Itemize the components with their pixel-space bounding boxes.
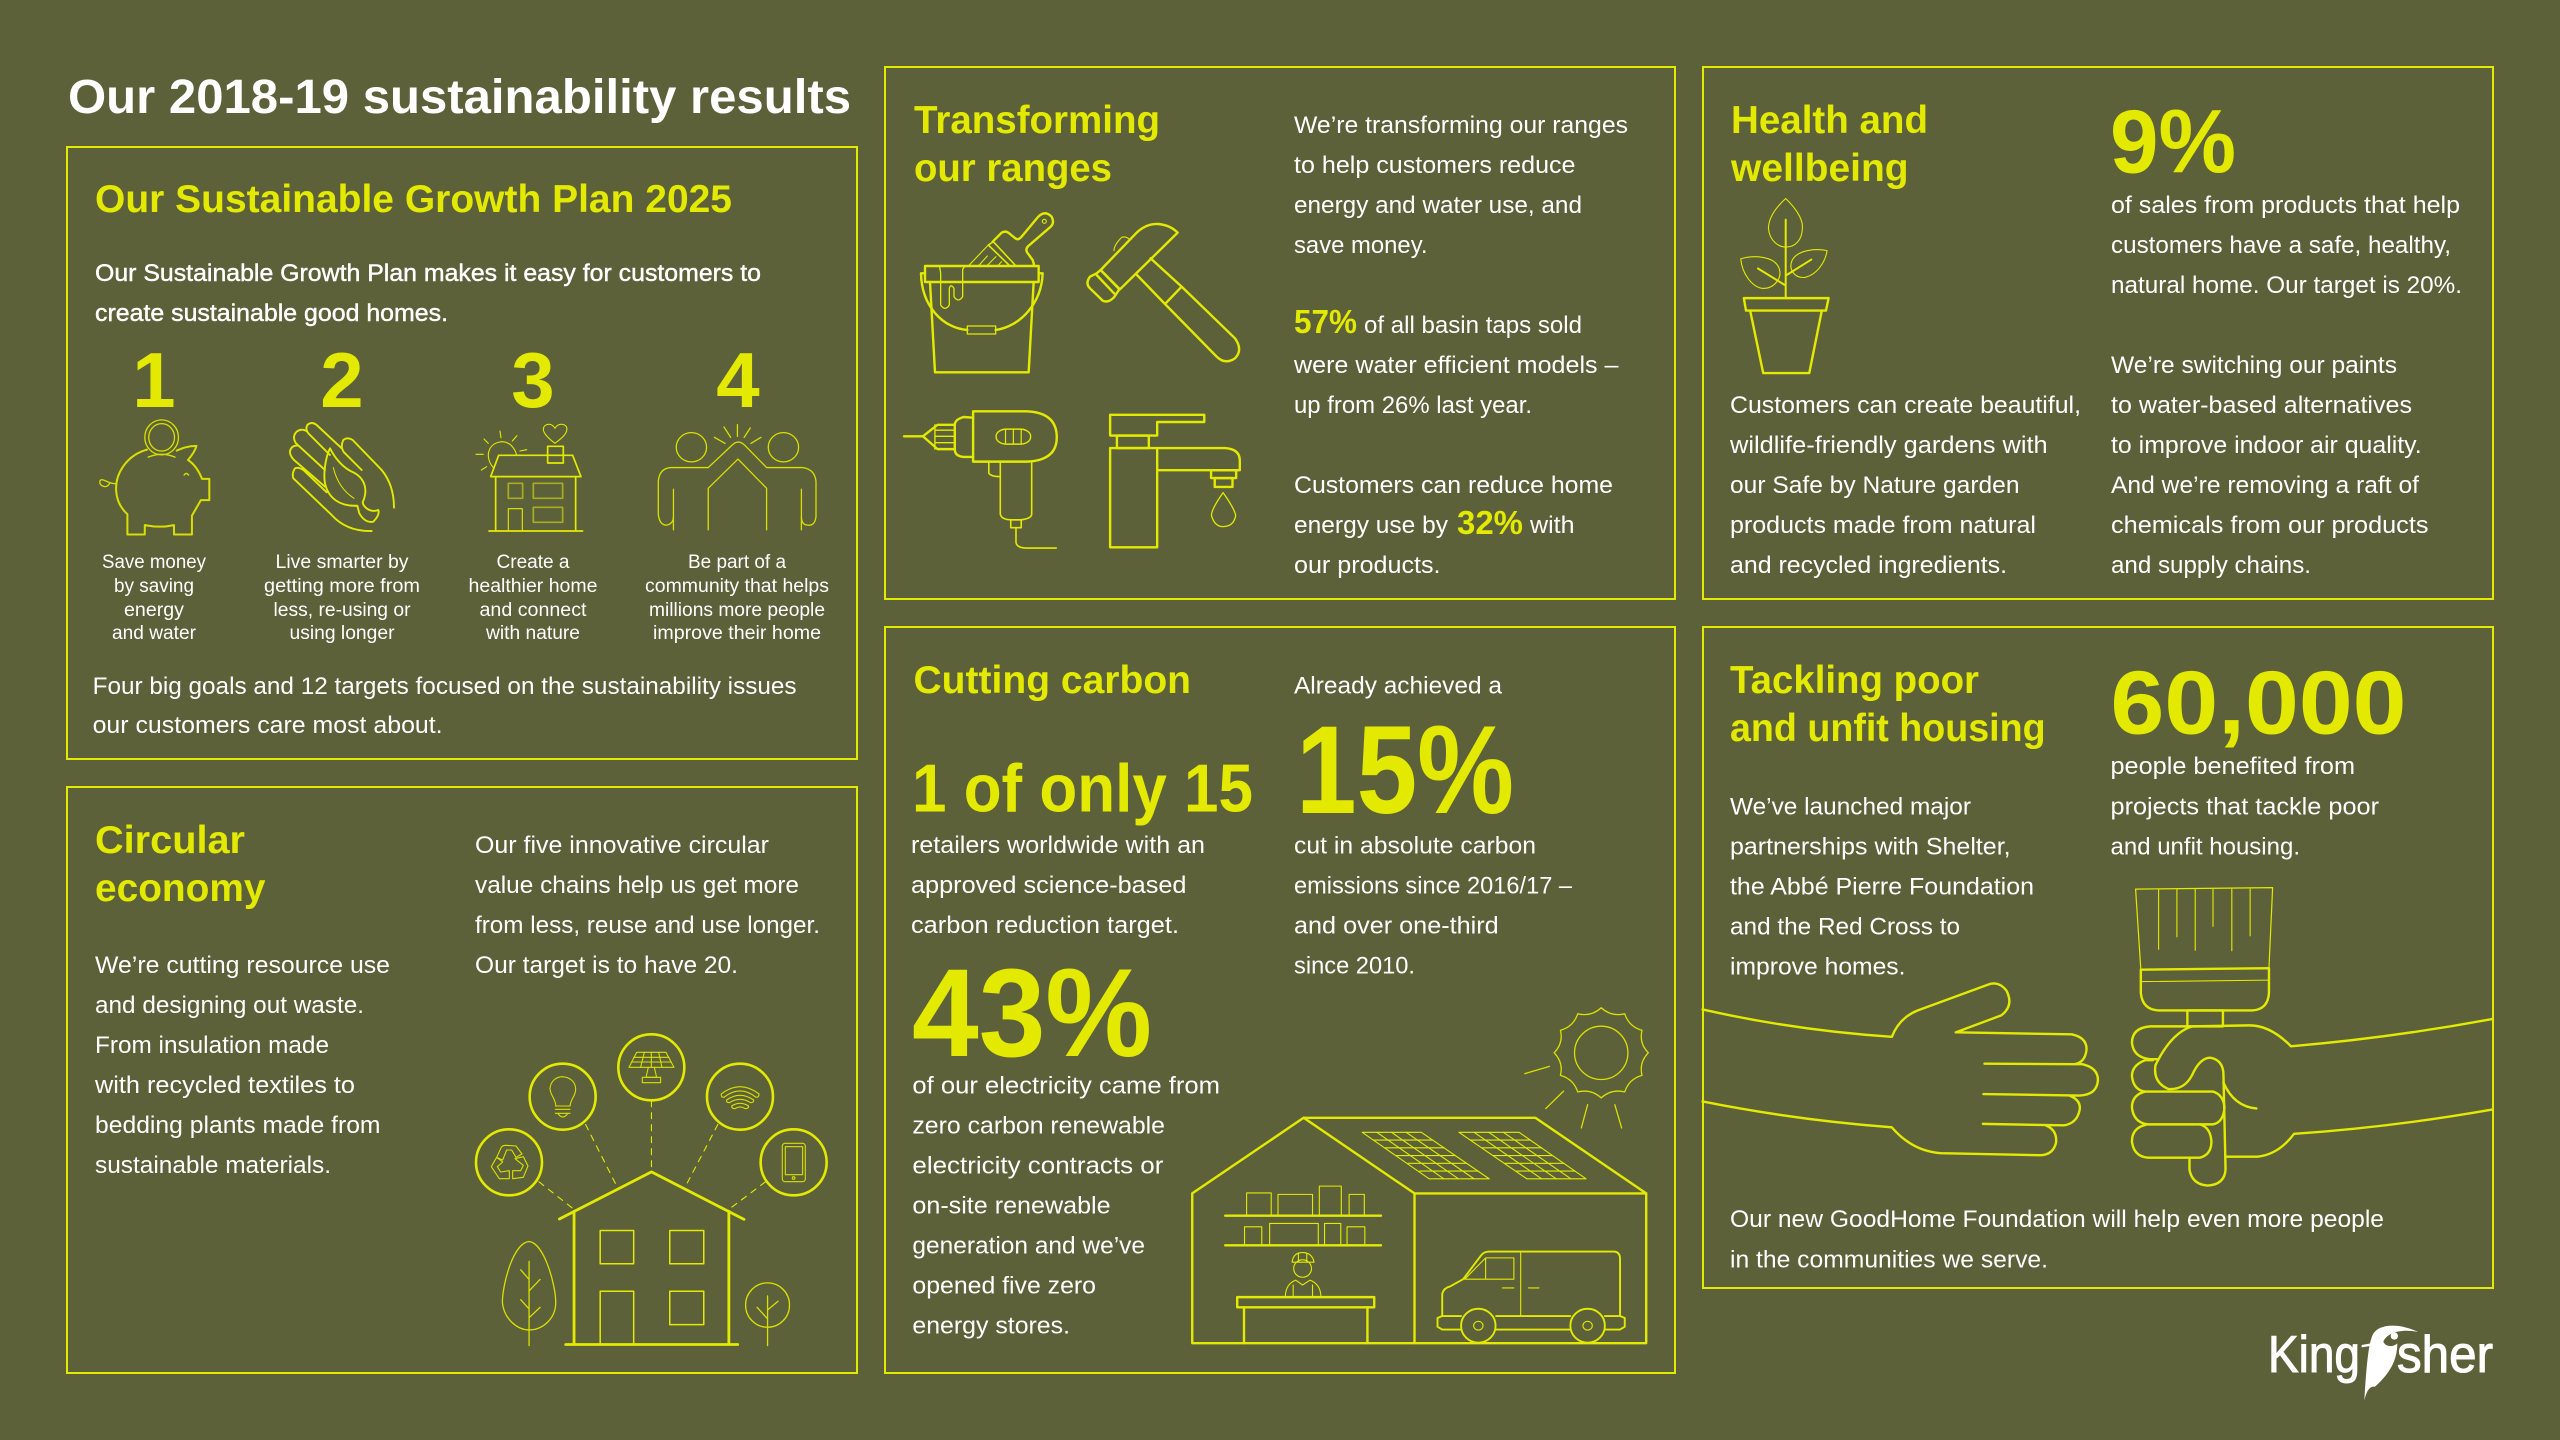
text: growth plan intro bbox=[95, 260, 761, 327]
heading: transforming our ranges: our ranges bbox=[914, 147, 1112, 190]
heading: circular economy: Circular bbox=[95, 819, 245, 862]
text: tackling left column: and the Red Cross to bbox=[1730, 914, 1960, 940]
icon: hands and leaf bbox=[290, 423, 394, 531]
stat: 1 of only 15: retailers worldwide with an bbox=[911, 832, 1205, 859]
text: circular left column bbox=[94, 952, 390, 1179]
heading: growth plan: Our Sustainable Growth Plan 2025 bbox=[95, 178, 732, 221]
text: circular left column: and designing out waste. bbox=[95, 992, 364, 1019]
stat: 43%: opened five zero bbox=[912, 1272, 1096, 1300]
text: health left column: wildlife-friendly gardens with bbox=[1729, 432, 2048, 459]
text: circular right column: Our five innovative circular bbox=[475, 832, 769, 859]
text: circular right column: from less, reuse and use longer. bbox=[475, 912, 820, 939]
icon: solar panels bbox=[1362, 1132, 1586, 1179]
goal 1: 1 bbox=[132, 336, 176, 424]
text: transforming first paragraph: We’re transforming our ranges bbox=[1294, 112, 1628, 139]
text: growth plan intro: Our Sustainable Growth Plan makes it easy for customers to bbox=[95, 260, 761, 287]
text: transforming first paragraph bbox=[1294, 112, 1628, 259]
caption: goal 4: Be part of a bbox=[688, 552, 786, 573]
stat: 43% bbox=[912, 944, 1220, 1340]
stat: 43%: on-site renewable bbox=[912, 1192, 1111, 1220]
text: 57% of basin taps: 57% bbox=[1294, 303, 1357, 340]
text: health paints paragraph: And we’re removing a raft of bbox=[2111, 472, 2419, 499]
circle: solar panel bbox=[618, 1034, 684, 1100]
icon: kingfisher bird bbox=[2362, 1326, 2418, 1401]
icon: mobile phone bbox=[782, 1143, 805, 1182]
stat: 60,000: and unfit housing. bbox=[2110, 834, 2300, 860]
goal 2: 2 bbox=[320, 336, 364, 424]
heading: tackling poor and unfit housing: Tackling poor bbox=[1730, 659, 1979, 702]
panel: Cutting carbon bbox=[885, 627, 1675, 1373]
text: goodhome foundation: Our new GoodHome Foundation will help even more people bbox=[1730, 1206, 2384, 1233]
icon: store worker bbox=[1285, 1253, 1321, 1296]
icon: small tree bbox=[746, 1283, 790, 1346]
circle: wifi bbox=[707, 1064, 773, 1130]
icon: zero energy store bbox=[1192, 1118, 1646, 1343]
caption: goal 3: Create a bbox=[496, 552, 570, 573]
stat: 15%: emissions since 2016/17 – bbox=[1294, 873, 1572, 900]
text: 32% home energy: energy use by bbox=[1294, 512, 1449, 539]
caption: goal 2: Live smarter by bbox=[276, 552, 409, 573]
panel: Transforming our ranges bbox=[885, 67, 1675, 599]
title: Our 2018-19 sustainability results bbox=[68, 71, 851, 124]
heading: cutting carbon: Cutting carbon bbox=[914, 659, 1191, 702]
caption: goal 1: Save money bbox=[102, 552, 206, 573]
circle: mobile phone bbox=[761, 1129, 827, 1195]
text: 57% of basin taps bbox=[1293, 303, 1619, 419]
connector lines bbox=[539, 1101, 765, 1209]
stat: 1 of only 15: 1 of only 15 bbox=[912, 750, 1253, 826]
goal 3: 3 bbox=[511, 336, 555, 424]
icon: house outline bbox=[559, 1172, 744, 1344]
icon: tall tree bbox=[502, 1242, 556, 1346]
icon: potted plant bbox=[1741, 199, 1829, 373]
caption: goal 3: with nature bbox=[485, 623, 580, 644]
stat: 43%: energy stores. bbox=[912, 1312, 1070, 1340]
caption: goal 3: healthier home bbox=[468, 576, 598, 597]
stat: 1 of only 15 bbox=[911, 750, 1253, 939]
icon: delivery van bbox=[1438, 1252, 1625, 1343]
text: 32% home energy: with bbox=[1529, 512, 1574, 539]
text: 32% home energy: our products. bbox=[1294, 552, 1440, 579]
text: circular right column: value chains help us get more bbox=[475, 872, 799, 899]
icon: wifi bbox=[721, 1087, 759, 1109]
panel: Health and wellbeing bbox=[1703, 67, 2493, 599]
icon: drill bbox=[904, 411, 1057, 548]
text: health left column: Customers can create beautiful, bbox=[1730, 392, 2081, 419]
text: health left column: our Safe by Nature garden bbox=[1730, 472, 2020, 499]
stat: 15%: 15% bbox=[1296, 701, 1514, 840]
text: health paints paragraph: We’re switching our paints bbox=[2111, 352, 2397, 379]
text: tackling left column: partnerships with Shelter, bbox=[1730, 834, 2011, 860]
caption: goal 1 bbox=[102, 552, 206, 644]
icon: hand holding paint brush bbox=[2132, 888, 2493, 1186]
panel: Tackling poor and unfit housing bbox=[1703, 627, 2493, 1288]
stat: 43%: electricity contracts or bbox=[912, 1152, 1163, 1180]
stat: 15% bbox=[1294, 673, 1572, 980]
text: circular right column bbox=[475, 832, 820, 979]
panel: Our Sustainable Growth Plan 2025 bbox=[67, 147, 857, 759]
stat: 15%: cut in absolute carbon bbox=[1294, 833, 1536, 860]
icon: hammer bbox=[1087, 224, 1239, 361]
text: 32% home energy: Customers can reduce home bbox=[1294, 472, 1613, 499]
text: 57% of basin taps: of all basin taps sold bbox=[1364, 312, 1582, 339]
heading: health and wellbeing: wellbeing bbox=[1730, 147, 1909, 190]
text: circular right column: Our target is to have 20. bbox=[475, 952, 738, 979]
goal 4 bbox=[645, 336, 829, 644]
heading: health and wellbeing: Health and bbox=[1731, 99, 1928, 142]
icon: house with sun and heart bbox=[476, 424, 583, 531]
text: health left column bbox=[1729, 392, 2081, 579]
stat: 43%: zero carbon renewable bbox=[912, 1112, 1165, 1140]
stat: 60,000: projects that tackle poor bbox=[2110, 794, 2379, 820]
text: health left column: and recycled ingredients. bbox=[1730, 552, 2007, 579]
text: health paints paragraph bbox=[2111, 352, 2428, 579]
heading: circular economy: economy bbox=[95, 867, 266, 910]
text: tackling left column: improve homes. bbox=[1730, 954, 1906, 980]
text: goodhome foundation: in the communities we serve. bbox=[1730, 1246, 2048, 1274]
text: health paints paragraph: chemicals from our products bbox=[2111, 512, 2428, 539]
text: 57% of basin taps: were water efficient models – bbox=[1293, 352, 1619, 379]
icon: open hand bbox=[1703, 983, 2098, 1155]
text: circular left column: with recycled textiles to bbox=[94, 1072, 355, 1099]
stat: 60,000: people benefited from bbox=[2110, 753, 2355, 780]
stat: 9%: customers have a safe, healthy, bbox=[2111, 232, 2451, 259]
text: circular left column: sustainable materials. bbox=[95, 1152, 331, 1179]
icon: sun bbox=[1525, 1008, 1648, 1128]
text: circular left column: bedding plants made from bbox=[95, 1112, 380, 1139]
text: tackling left column bbox=[1730, 794, 2034, 980]
text: circular left column: We’re cutting resource use bbox=[95, 952, 390, 979]
logo: Kingfisher: King bbox=[2268, 1326, 2360, 1384]
goal 4: 4 bbox=[716, 336, 760, 424]
caption: goal 1: by saving bbox=[114, 576, 194, 597]
goal 3 bbox=[468, 336, 598, 644]
text: 57% of basin taps: up from 26% last year. bbox=[1294, 392, 1532, 419]
circle: recycling bbox=[476, 1129, 542, 1195]
caption: goal 4: community that helps bbox=[645, 576, 829, 597]
heading: tackling poor and unfit housing: and unfit housing bbox=[1730, 707, 2046, 750]
stat: 15%: Already achieved a bbox=[1294, 673, 1502, 700]
stat: 60,000: 60,000 bbox=[2110, 653, 2406, 753]
text: transforming first paragraph: to help customers reduce bbox=[1294, 152, 1576, 179]
icon: solar panel bbox=[629, 1052, 674, 1083]
heading: health and wellbeing bbox=[1730, 99, 1928, 190]
text: health paints paragraph: and supply chains. bbox=[2111, 552, 2311, 579]
caption: goal 4: millions more people bbox=[649, 600, 825, 621]
stat: 43%: generation and we’ve bbox=[912, 1232, 1145, 1260]
stat: 9%: 9% bbox=[2110, 92, 2236, 192]
text: transforming first paragraph: energy and water use, and bbox=[1294, 192, 1582, 219]
text: growth plan intro: create sustainable good homes. bbox=[95, 300, 448, 327]
stat: 1 of only 15: carbon reduction target. bbox=[911, 912, 1179, 939]
logo: Kingfisher bbox=[2268, 1326, 2493, 1401]
logo: Kingfisher: sher bbox=[2397, 1326, 2493, 1384]
text: health paints paragraph: to improve indoor air quality. bbox=[2111, 432, 2422, 459]
caption: goal 2: getting more from bbox=[264, 576, 420, 597]
stat: 9%: of sales from products that help bbox=[2111, 192, 2460, 219]
text: goodhome foundation bbox=[1730, 1206, 2384, 1274]
goal 2 bbox=[264, 336, 420, 644]
goal 1 bbox=[100, 336, 209, 644]
icon: piggy bank bbox=[100, 420, 209, 535]
stat: 43%: 43% bbox=[912, 944, 1152, 1083]
icon: recycling symbol bbox=[491, 1145, 528, 1179]
caption: goal 2: less, re-using or bbox=[274, 600, 411, 621]
heading: circular economy bbox=[95, 819, 266, 910]
illustration: house with five value chains bbox=[476, 1034, 827, 1346]
caption: goal 3: and connect bbox=[480, 600, 587, 621]
heading: transforming our ranges: Transforming bbox=[914, 99, 1160, 142]
text: tackling left column: We’ve launched major bbox=[1730, 794, 1971, 820]
text: transforming first paragraph: save money. bbox=[1294, 232, 1428, 259]
caption: goal 4 bbox=[645, 552, 829, 644]
icon: house windows and door bbox=[600, 1230, 704, 1344]
caption: goal 3 bbox=[468, 552, 598, 644]
heading: transforming our ranges bbox=[914, 99, 1160, 190]
caption: goal 4: improve their home bbox=[653, 623, 821, 644]
icon: paint bucket and brush bbox=[921, 213, 1053, 372]
icon: people high five bbox=[658, 425, 816, 530]
caption: goal 1: energy bbox=[124, 600, 185, 621]
icon: light bulb bbox=[550, 1077, 576, 1117]
caption: goal 1: and water bbox=[112, 623, 197, 644]
text: growth plan footer bbox=[93, 673, 797, 739]
stat: 9% bbox=[2110, 92, 2462, 299]
circle: light bulb bbox=[530, 1064, 596, 1130]
text: health left column: products made from natural bbox=[1730, 512, 2036, 539]
text: 32% home energy: 32% bbox=[1457, 504, 1523, 541]
text: tackling left column: the Abbé Pierre Foundation bbox=[1730, 874, 2034, 900]
stat: 15%: and over one-third bbox=[1294, 913, 1499, 940]
caption: goal 2: using longer bbox=[290, 623, 395, 644]
text: growth plan footer: Four big goals and 12 targets focused on the sustainability issues bbox=[93, 673, 797, 700]
text: health paints paragraph: to water-based alternatives bbox=[2111, 392, 2412, 419]
text: growth plan footer: our customers care most about. bbox=[93, 712, 443, 739]
panel: Circular economy bbox=[67, 787, 857, 1373]
stat: 15%: since 2010. bbox=[1294, 953, 1415, 980]
stat: 60,000 bbox=[2110, 653, 2406, 860]
stat: 1 of only 15: approved science-based bbox=[911, 872, 1186, 899]
text: circular left column: From insulation made bbox=[95, 1032, 329, 1059]
caption: goal 2 bbox=[264, 552, 420, 644]
stat: 9%: natural home. Our target is 20%. bbox=[2111, 272, 2462, 299]
icon: basin tap bbox=[1110, 415, 1240, 547]
icon: shelf boxes bbox=[1245, 1186, 1365, 1245]
stat: 43%: of our electricity came from bbox=[912, 1072, 1220, 1100]
text: 32% home energy bbox=[1294, 472, 1613, 579]
heading: tackling poor and unfit housing bbox=[1730, 659, 2046, 750]
